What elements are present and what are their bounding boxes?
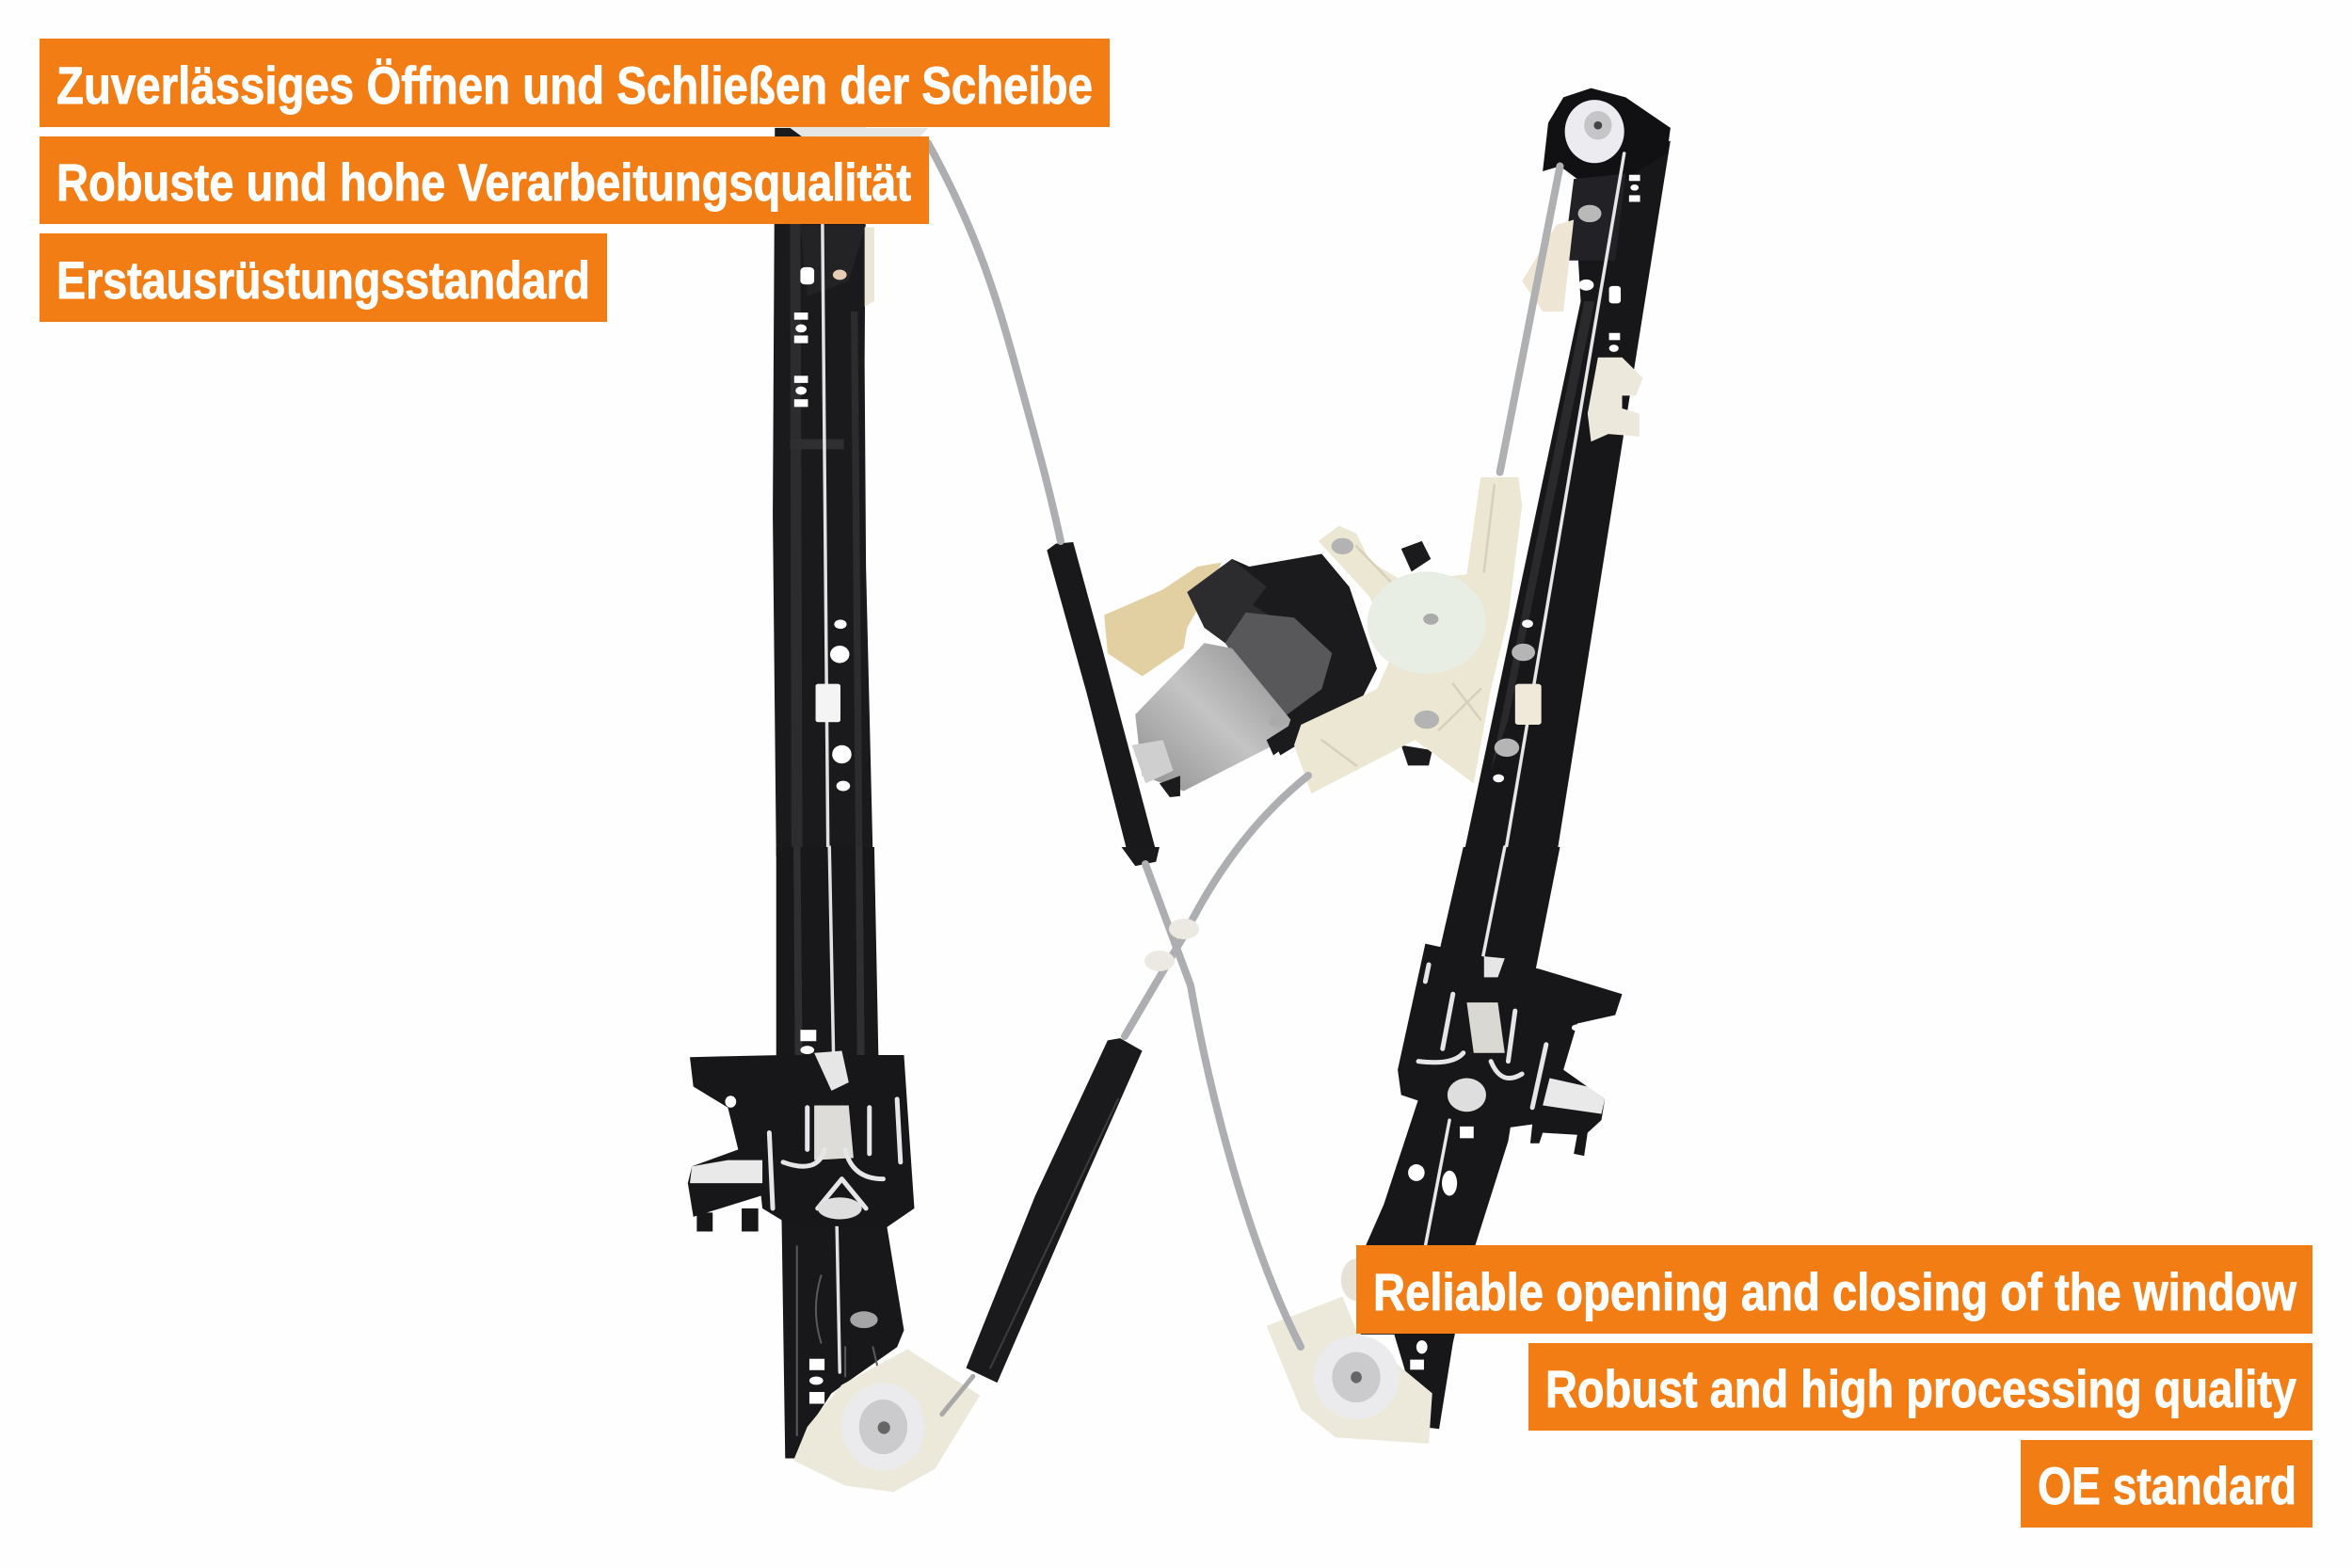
black sleeve upper <box>1047 542 1158 856</box>
lower half of regulator <box>688 847 1623 1492</box>
label: Robuste und hohe Verarbeitungsqualität <box>40 136 929 224</box>
lower left sleeve <box>966 1038 1143 1383</box>
gearbox dark gray <box>1187 559 1332 720</box>
bottom right pulley plate <box>1267 1297 1432 1444</box>
right rail lower <box>1341 847 1560 1429</box>
left rail upper <box>773 128 928 856</box>
label: Robuste und hohe Verarbeitungsqualität: Robuste und hohe Verarbeitungsqualität <box>56 152 911 212</box>
connector cream <box>1104 563 1222 677</box>
right gray rod <box>1500 167 1560 472</box>
right rail upper <box>1464 88 1671 856</box>
German feature labels <box>40 39 1110 322</box>
label: Erstausrüstungsstandard <box>40 233 607 322</box>
cable clips <box>1144 919 1199 971</box>
right carriage <box>1398 944 1623 1156</box>
motor black housing <box>1232 541 1432 765</box>
left rail lower <box>776 847 904 1459</box>
long gray cable <box>1145 864 1301 1347</box>
label: Reliable opening <box>1356 1245 2312 1334</box>
sleeve end <box>1122 847 1160 866</box>
motor body <box>1132 643 1290 797</box>
crossing rod <box>1125 776 1308 1036</box>
gear bracket cream <box>1270 477 1522 793</box>
label: OE standard <box>2021 1440 2312 1528</box>
left carriage <box>688 1051 914 1231</box>
English feature labels <box>1356 1245 2312 1528</box>
product photo: window regulator <box>688 88 1671 1492</box>
upper gray cable conduit <box>928 143 1061 541</box>
label: Erstausrüstungsstandard: Erstausrüstungsstandard <box>56 250 590 310</box>
label: OE standard: OE standard <box>2038 1456 2296 1515</box>
label: Zuverlässiges Öffnen: Zuverlässiges Öffnen und Schließen der Scheibe <box>56 56 1093 115</box>
bottom left pulley plate <box>793 1349 980 1492</box>
upper half of regulator <box>773 88 1671 856</box>
top pulley <box>1565 100 1624 163</box>
label: Zuverlässiges Öffnen <box>40 39 1110 127</box>
label: Robust and high processing quality <box>1528 1343 2312 1431</box>
